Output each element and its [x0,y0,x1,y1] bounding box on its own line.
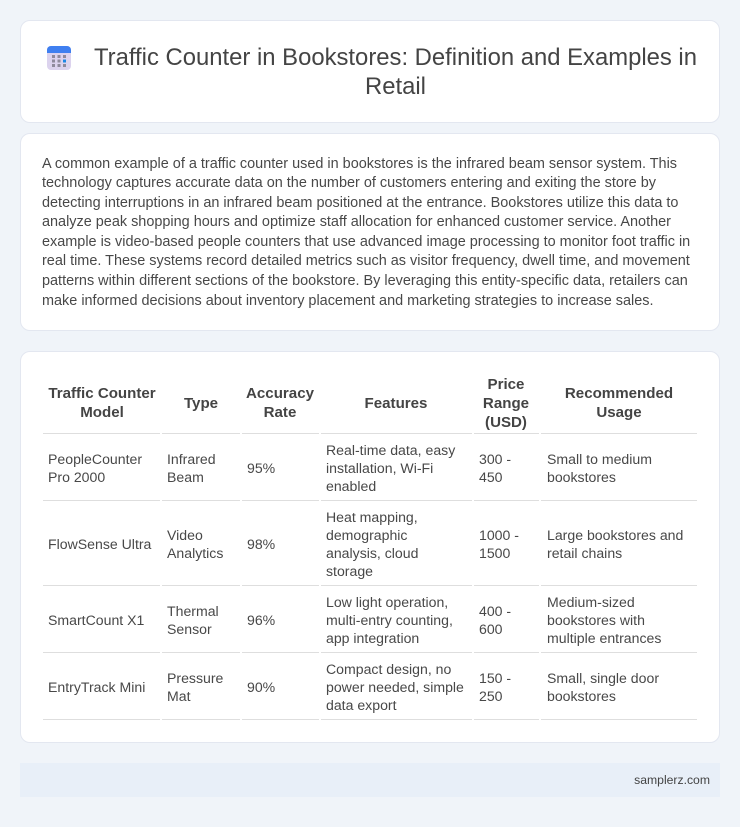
title: Retail [365,73,426,100]
header: features: Features [365,395,427,412]
table: traffic counter comparison: Infrared [167,451,216,467]
table: traffic counter comparison: installation, Wi-Fi [326,460,433,476]
footer text: samplerz.com [634,773,710,787]
header: usage [565,385,673,421]
table: traffic counter comparison: Large bookstores and [547,527,683,543]
text block: description: example is video-based people counters that use advanced image processing to monitor foot traffic in [42,234,690,250]
table: traffic counter comparison: 600 [479,621,503,637]
table: traffic counter comparison: Real-time data, easy [326,442,455,458]
table: traffic counter comparison: Mat [167,688,190,704]
text block: description: detecting interruptions in an infrared beam positioned at the entrance. Bookstores utilize this data to [42,195,678,211]
text block: description: technology captures accurate data on the number of customers entering and exiting the store by [42,175,656,191]
panel: title card [20,20,720,123]
table: traffic counter comparison: 450 [479,469,503,485]
icon: calendar [47,46,71,70]
header: model [48,385,156,421]
table: traffic counter comparison: 90% [247,679,275,695]
text block: description: patterns within different sections of the bookstore. By leveraging this entity-specific data, retailers can [42,273,688,289]
header: accuracy [246,385,314,421]
table: traffic counter comparison: Analytics [167,545,223,561]
table: traffic counter comparison: app integration [326,630,419,646]
header: usage: Recommended [565,385,673,402]
table: traffic counter comparison [43,376,697,720]
row: FlowSense: FlowSense Ultra [48,536,151,552]
table: traffic counter comparison: Beam [167,469,204,485]
row: PeopleCounter: Pro 2000 [48,469,105,485]
header: price: Price [488,376,524,393]
header: model: Traffic Counter [48,385,156,402]
table: traffic counter comparison: Small, single door [547,670,659,686]
header: price: (USD) [485,414,527,431]
row: SmartCount: SmartCount X1 [48,612,144,628]
table: traffic counter comparison: analysis, cloud [326,545,418,561]
table: traffic counter comparison: bookstores with [547,612,645,628]
header: type: Type [184,395,218,412]
table: traffic counter comparison: bookstores [547,469,616,485]
table: traffic counter comparison: Sensor [167,621,212,637]
table: traffic counter comparison: 1000 - [479,527,519,543]
title: Traffic Counter in Bookstores: Definition and Examples in [94,44,697,71]
table: traffic counter comparison: Pressure [167,670,223,686]
table: traffic counter comparison: 96% [247,612,275,628]
footer bar [20,763,720,797]
text block: description [42,156,690,309]
table: traffic counter comparison: Small to medium [547,451,652,467]
row: EntryTrack: EntryTrack Mini [48,679,145,695]
table: traffic counter comparison: multi-entry counting, [326,612,453,628]
header: accuracy: Accuracy [246,385,314,402]
table: traffic counter comparison: enabled [326,478,376,494]
panel: description card [20,133,720,331]
header: usage: Usage [596,404,642,421]
text block: description: analyze peak shopping hours and optimize staff allocation for enhanced customer service. Another [42,214,671,230]
table: traffic counter comparison: 150 - [479,670,511,686]
table: traffic counter comparison: 400 - [479,603,511,619]
text block: description: real time. These systems record detailed metrics such as visitor frequency, dwell time, and movement [42,253,690,269]
table: traffic counter comparison: multiple entrances [547,630,661,646]
header: price: Range [483,395,529,412]
table: traffic counter comparison: Heat mapping, [326,509,418,525]
table: traffic counter comparison: 250 [479,688,503,704]
table: traffic counter comparison: bookstores [547,688,616,704]
panel: table card [20,351,720,743]
table: traffic counter comparison: data export [326,697,397,713]
table: traffic counter comparison: 1500 [479,545,510,561]
table: traffic counter comparison: demographic [326,527,407,543]
header: accuracy: Rate [264,404,296,421]
text block: description: make informed decisions about inventory placement and marketing strategies to increase sales. [42,293,654,309]
header: price [483,376,529,431]
table: traffic counter comparison: power needed, simple [326,679,464,695]
row: PeopleCounter: PeopleCounter [48,451,142,467]
table: traffic counter comparison: Low light operation, [326,594,448,610]
table: traffic counter comparison: Medium-sized [547,594,635,610]
table: traffic counter comparison: Thermal [167,603,219,619]
table: traffic counter comparison: storage [326,563,373,579]
row: PeopleCounter [48,451,142,485]
table: traffic counter comparison: Video [167,527,203,543]
table: traffic counter comparison: Compact design, no [326,661,451,677]
header: model: Model [80,404,124,421]
text block: description: A common example of a traffic counter used in bookstores is the infrared beam sensor system. This [42,156,677,172]
table: traffic counter comparison: 95% [247,460,275,476]
title [94,44,697,100]
table: traffic counter comparison: retail chains [547,545,622,561]
table: traffic counter comparison: 98% [247,536,275,552]
table: traffic counter comparison: 300 - [479,451,511,467]
